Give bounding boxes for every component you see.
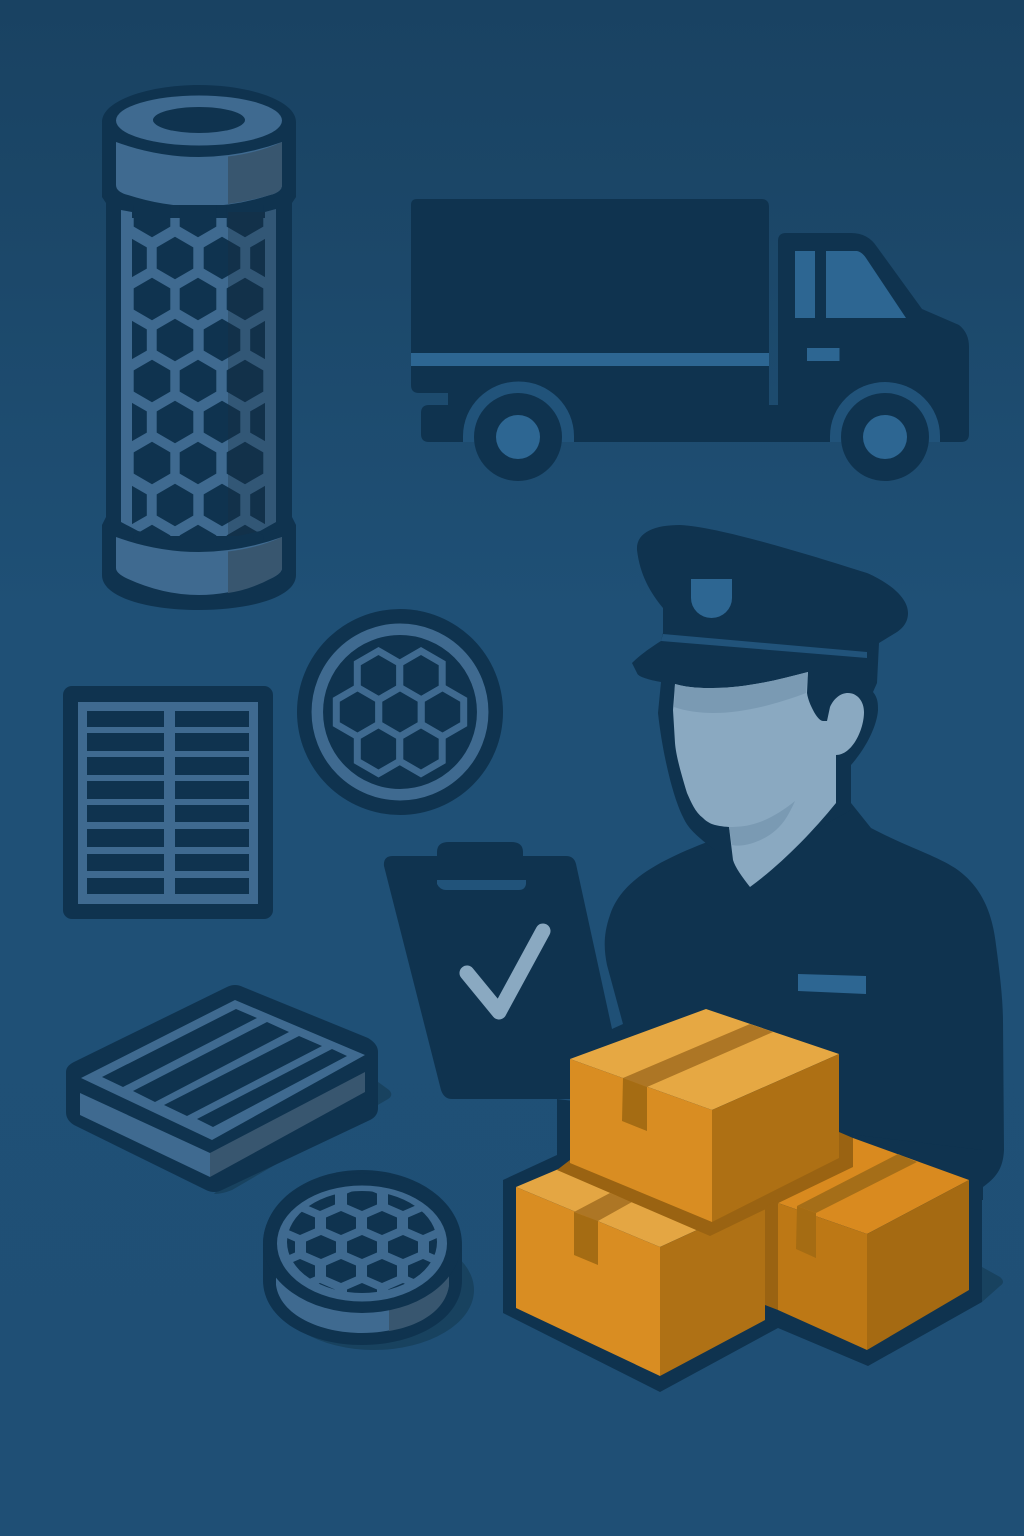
- parcel outline: [503, 1099, 982, 1392]
- right parcel: [778, 1138, 969, 1350]
- rear wheel: [463, 382, 574, 481]
- cap band: [661, 634, 867, 658]
- head and cap silhouette: [632, 525, 908, 887]
- inspector figure: [605, 525, 1004, 1200]
- clipboard clip slot: [437, 880, 526, 890]
- truck door handle: [807, 348, 840, 361]
- left parcel: [516, 1165, 765, 1376]
- name tag: [798, 974, 866, 994]
- clipboard with checkmark: [384, 842, 640, 1099]
- checkmark: [467, 931, 543, 1012]
- icon: isometric panel filter: [66, 985, 391, 1194]
- icon: cylindrical filter cartridge: [102, 85, 296, 610]
- icon: circular honeycomb filter: [297, 609, 503, 815]
- uniform body: [605, 803, 1004, 1200]
- top parcel: [570, 1009, 839, 1222]
- parcel stack: [503, 1009, 1003, 1392]
- parcel shadow: [982, 1267, 1003, 1302]
- chin shadow: [729, 801, 795, 846]
- icon: round filter disc: [263, 1170, 474, 1350]
- icon: delivery truck: [411, 199, 969, 481]
- icon: rectangular grid filter: [63, 686, 273, 919]
- face and neck: [673, 672, 864, 887]
- cap badge: [691, 579, 732, 618]
- truck windshield: [826, 251, 906, 318]
- front wheel: [830, 382, 940, 481]
- cast shadow between parcels: [557, 1132, 853, 1310]
- truck cargo stripe: [411, 353, 769, 366]
- forehead shadow: [674, 672, 808, 713]
- truck side window: [795, 251, 815, 318]
